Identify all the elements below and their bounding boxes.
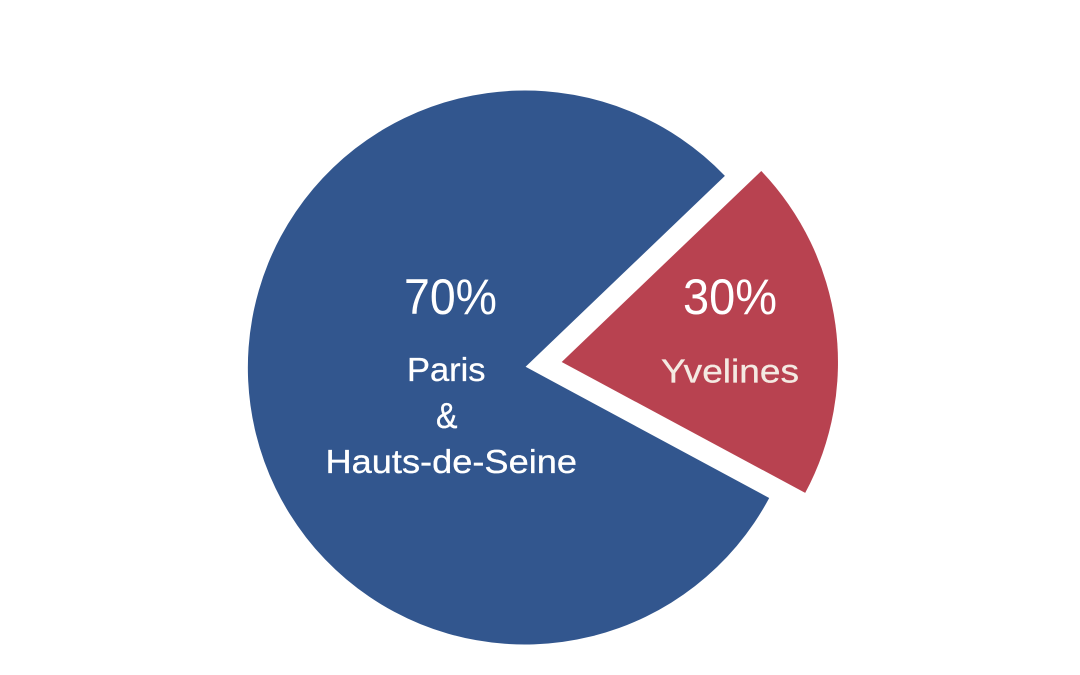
slice: Yvelines 30% [562, 171, 838, 493]
label: Paris and Hauts-de-Seine [326, 351, 577, 480]
slice: Paris and Hauts-de-Seine 70% [248, 91, 769, 645]
label: Paris and Hauts-de-Seine: Paris [407, 351, 486, 388]
label: Paris and Hauts-de-Seine: Hauts-de-Seine [326, 443, 577, 480]
label: 30%: 30% [683, 269, 777, 325]
label: Paris and Hauts-de-Seine: & [436, 395, 458, 436]
label: Yvelines: Yvelines [661, 352, 799, 390]
label: 70%: 70% [404, 269, 497, 325]
